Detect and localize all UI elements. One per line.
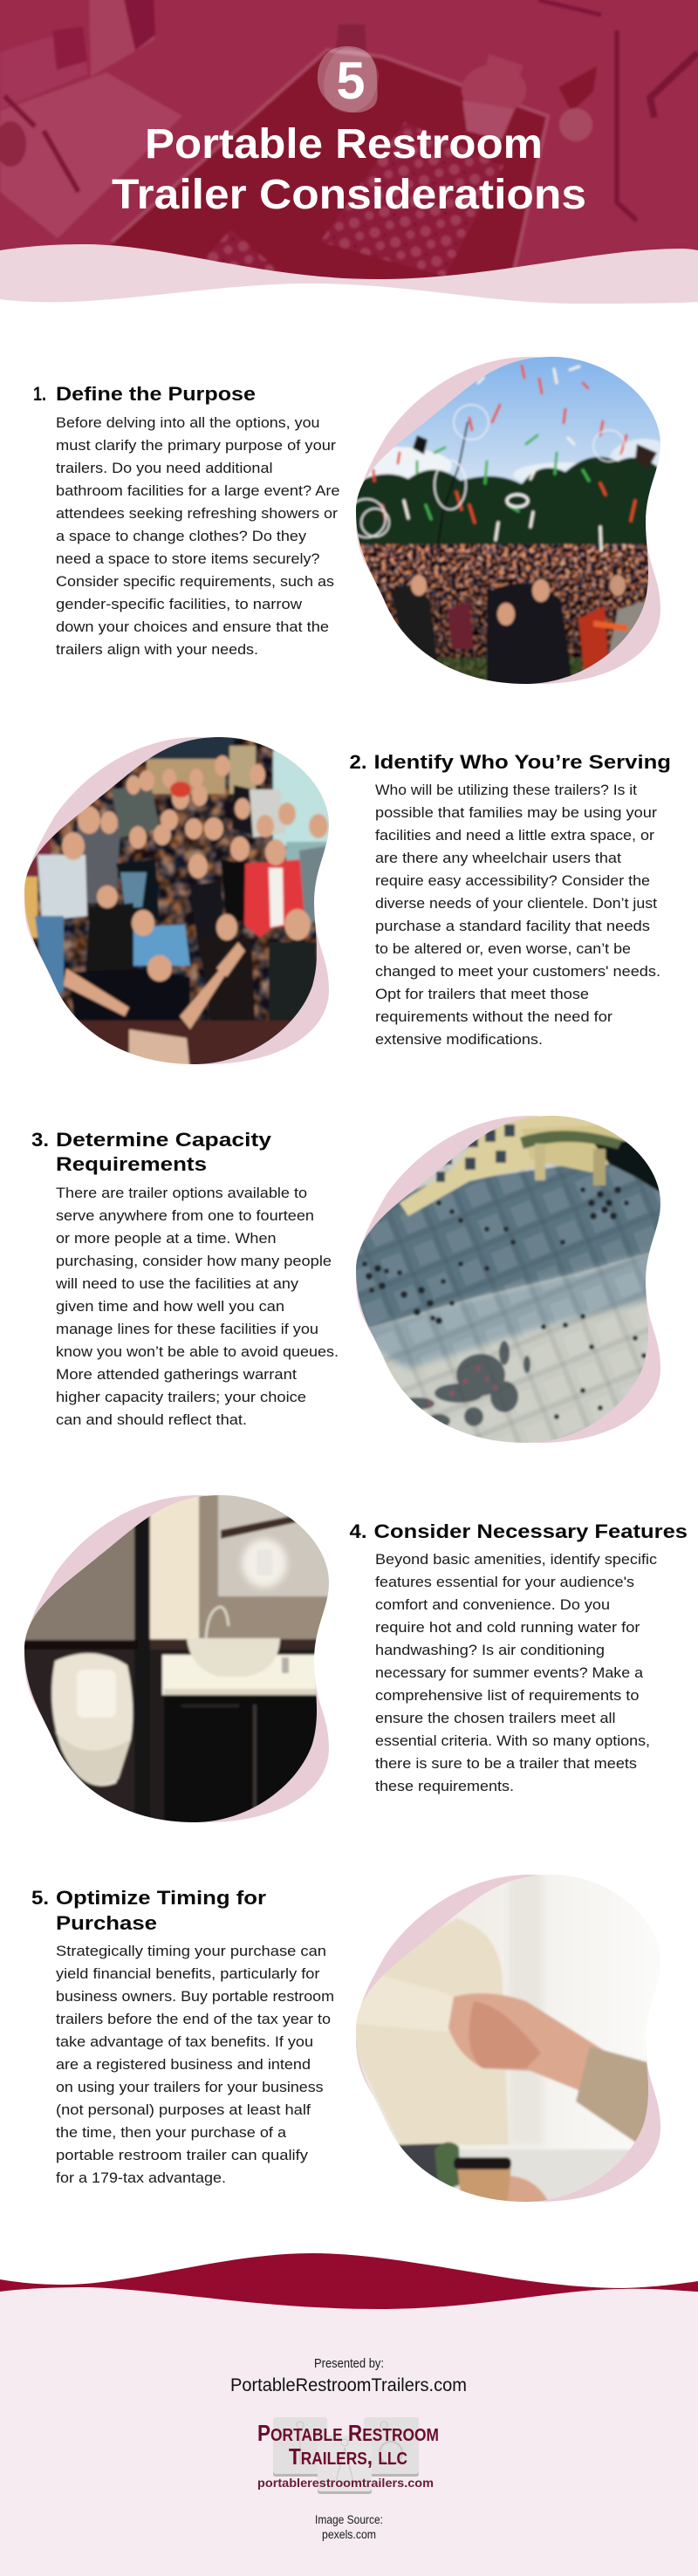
- heading 1: Define the Purpose: [56, 383, 256, 405]
- text block 4: require hot and cold running water for: [375, 1619, 640, 1636]
- text block 3: purchasing, consider how many people: [56, 1253, 332, 1269]
- text block 1: down your choices and ensure that the: [56, 618, 329, 635]
- wave: dark red band: [0, 2253, 698, 2309]
- title: Trailer Considerations: [112, 172, 586, 218]
- text block 3: given time and how well you can: [56, 1298, 284, 1315]
- text block 4: comprehensive list of requirements to: [375, 1687, 639, 1704]
- text block 4: there is sure to be a trailer that meets: [375, 1755, 637, 1772]
- footer background: [0, 2287, 698, 2576]
- text block 5: (not personal) purposes at least half: [56, 2101, 311, 2118]
- heading 3: Requirements: [56, 1153, 207, 1175]
- heading 4: Consider Necessary Features: [373, 1520, 688, 1542]
- text block 2: Who will be utilizing these trailers? Is it: [375, 782, 637, 798]
- text block 1: attendees seeking refreshing showers or: [56, 505, 338, 522]
- text block 4: ensure the chosen trailers meet all: [375, 1710, 616, 1726]
- text block 1: need a space to store items securely?: [56, 550, 319, 567]
- text block 1: Before delving into all the options, you: [56, 414, 320, 431]
- image source label: Image Source:: [315, 2512, 383, 2526]
- text block 2: changed to meet your customers' needs.: [375, 963, 660, 980]
- heading 5: Optimize Timing for: [56, 1887, 266, 1909]
- wave: white base: [0, 284, 698, 318]
- text block 5: take advantage of tax benefits. If you: [56, 2033, 313, 2050]
- heading 1: 1.: [33, 383, 46, 405]
- text block 4: features essential for your audience's: [375, 1574, 634, 1590]
- text block 2: purchase a standard facility that needs: [375, 918, 650, 934]
- text block 2: diverse needs of your clientele. Don’t just: [375, 895, 657, 912]
- text block 3: [55, 1185, 339, 1428]
- text block 1: bathroom facilities for a large event? Are: [56, 482, 340, 499]
- panel: 5 optimize timing for purchase: [31, 1866, 670, 2210]
- text block 3: There are trailer options available to: [56, 1185, 307, 1201]
- text block 3: or more people at a time. When: [56, 1230, 276, 1247]
- text block 4: essential criteria. With so many options,: [375, 1732, 650, 1749]
- text block 5: the time, then your purchase of a: [56, 2124, 287, 2141]
- text block 5: are a registered business and intend: [56, 2056, 311, 2073]
- presented by label: Presented by:: [314, 2357, 384, 2371]
- number blob: [318, 46, 379, 113]
- text block 3: More attended gatherings warrant: [56, 1366, 297, 1383]
- logo name: [257, 2420, 439, 2470]
- logo icons: restroom signs: [273, 2417, 419, 2494]
- wave: pink band: [0, 244, 698, 314]
- title: Portable Restroom: [145, 121, 543, 167]
- logo name: TRAILERS, LLC: [289, 2443, 407, 2470]
- logo name: PORTABLE RESTROOM: [257, 2420, 439, 2446]
- logo url: portablerestroomtrailers.com: [257, 2476, 434, 2490]
- heading 5: [31, 1887, 266, 1934]
- text block 3: manage lines for these facilities if you: [56, 1321, 318, 1337]
- text block 3: serve anywhere from one to fourteen: [56, 1207, 314, 1224]
- heading 3: 3.: [31, 1129, 49, 1151]
- title: [112, 121, 586, 218]
- header photo: restroom seen from above, tinted red: [0, 0, 698, 305]
- number 5: 5: [337, 51, 365, 110]
- text block 5: portable restroom trailer can qualify: [56, 2147, 309, 2163]
- text block 5: [56, 1943, 334, 2186]
- text block 5: trailers before the end of the tax year to: [56, 2011, 331, 2027]
- text block 2: requirements without the need for: [375, 1008, 612, 1025]
- text block 4: these requirements.: [375, 1778, 514, 1794]
- text block 1: must clarify the primary purpose of your: [56, 437, 336, 454]
- text block 1: Consider specific requirements, such as: [56, 573, 334, 590]
- text block 5: yield financial benefits, particularly for: [56, 1965, 320, 1982]
- text block 3: know you won’t be able to avoid queues.: [56, 1343, 339, 1360]
- blob photo: handshake: [356, 1875, 660, 2202]
- faces: [62, 755, 328, 1029]
- heading 5: Purchase: [56, 1912, 157, 1934]
- logo: [257, 2417, 439, 2494]
- blob photo: plaza from above: [356, 1116, 660, 1443]
- text block 2: to be altered or, even worse, can’t be: [375, 940, 631, 957]
- heading 5: 5.: [31, 1887, 49, 1909]
- heading 2: 2.: [349, 751, 366, 773]
- website: PortableRestroomTrailers.com: [230, 2375, 467, 2395]
- text block 3: can and should reflect that.: [56, 1411, 247, 1428]
- text block 4: necessary for summer events? Make a: [375, 1664, 644, 1681]
- blob photo: group of people: [24, 737, 329, 1064]
- crowd of people dots: [362, 1186, 647, 1419]
- text block 3: will need to use the facilities at any: [55, 1275, 299, 1292]
- heading 3: Determine Capacity: [56, 1129, 272, 1151]
- text block 2: require easy accessibility? Consider the: [375, 872, 650, 889]
- text block 5: for a 179-tax advantage.: [56, 2169, 226, 2186]
- panel: 3 determine capacity requirements: [31, 1107, 670, 1452]
- text block 1: trailers. Do you need additional: [56, 460, 272, 476]
- panel: 1 define the purpose: [33, 348, 679, 693]
- blob photo: restroom interior: [24, 1495, 329, 1822]
- header panel: [0, 0, 698, 318]
- text block 1: gender-specific facilities, to narrow: [56, 596, 303, 612]
- text block 2: possible that families may be using your: [375, 804, 657, 821]
- text block 4: comfort and convenience. Do you: [375, 1596, 610, 1613]
- text block 3: higher capacity trailers; your choice: [56, 1389, 306, 1405]
- text block 5: Strategically timing your purchase can: [56, 1943, 326, 1959]
- juggling clubs and rings: [347, 366, 635, 566]
- heading 4: 4.: [349, 1520, 366, 1542]
- panel: 4 consider necessary features: [16, 1486, 688, 1831]
- footer panel: [0, 2253, 698, 2576]
- text block 2: Opt for trailers that meet those: [375, 986, 589, 1002]
- text block 2: are there any wheelchair users that: [375, 850, 621, 866]
- panel: 2 identify who you're serving: [16, 728, 671, 1073]
- text block 2: [375, 782, 660, 1048]
- image source site: pexels.com: [322, 2527, 376, 2541]
- text block 1: trailers align with your needs.: [56, 641, 258, 658]
- text block 5: on using your trailers for your business: [56, 2079, 324, 2095]
- text block 1: a space to change clothes? Do they: [56, 528, 307, 544]
- text block 1: [56, 414, 340, 658]
- text block 2: extensive modifications.: [375, 1031, 543, 1048]
- heading 3: [31, 1129, 272, 1175]
- text block 4: [375, 1551, 658, 1794]
- text block 4: Beyond basic amenities, identify specific: [375, 1551, 658, 1568]
- text block 2: facilities and need a little extra space, or: [375, 827, 654, 844]
- text block 5: business owners. Buy portable restroom: [56, 1988, 334, 2005]
- text block 4: handwashing? Is air conditioning: [375, 1642, 605, 1658]
- blob photo: crowd juggling: [356, 357, 660, 684]
- heading 2: Identify Who You’re Serving: [373, 751, 671, 773]
